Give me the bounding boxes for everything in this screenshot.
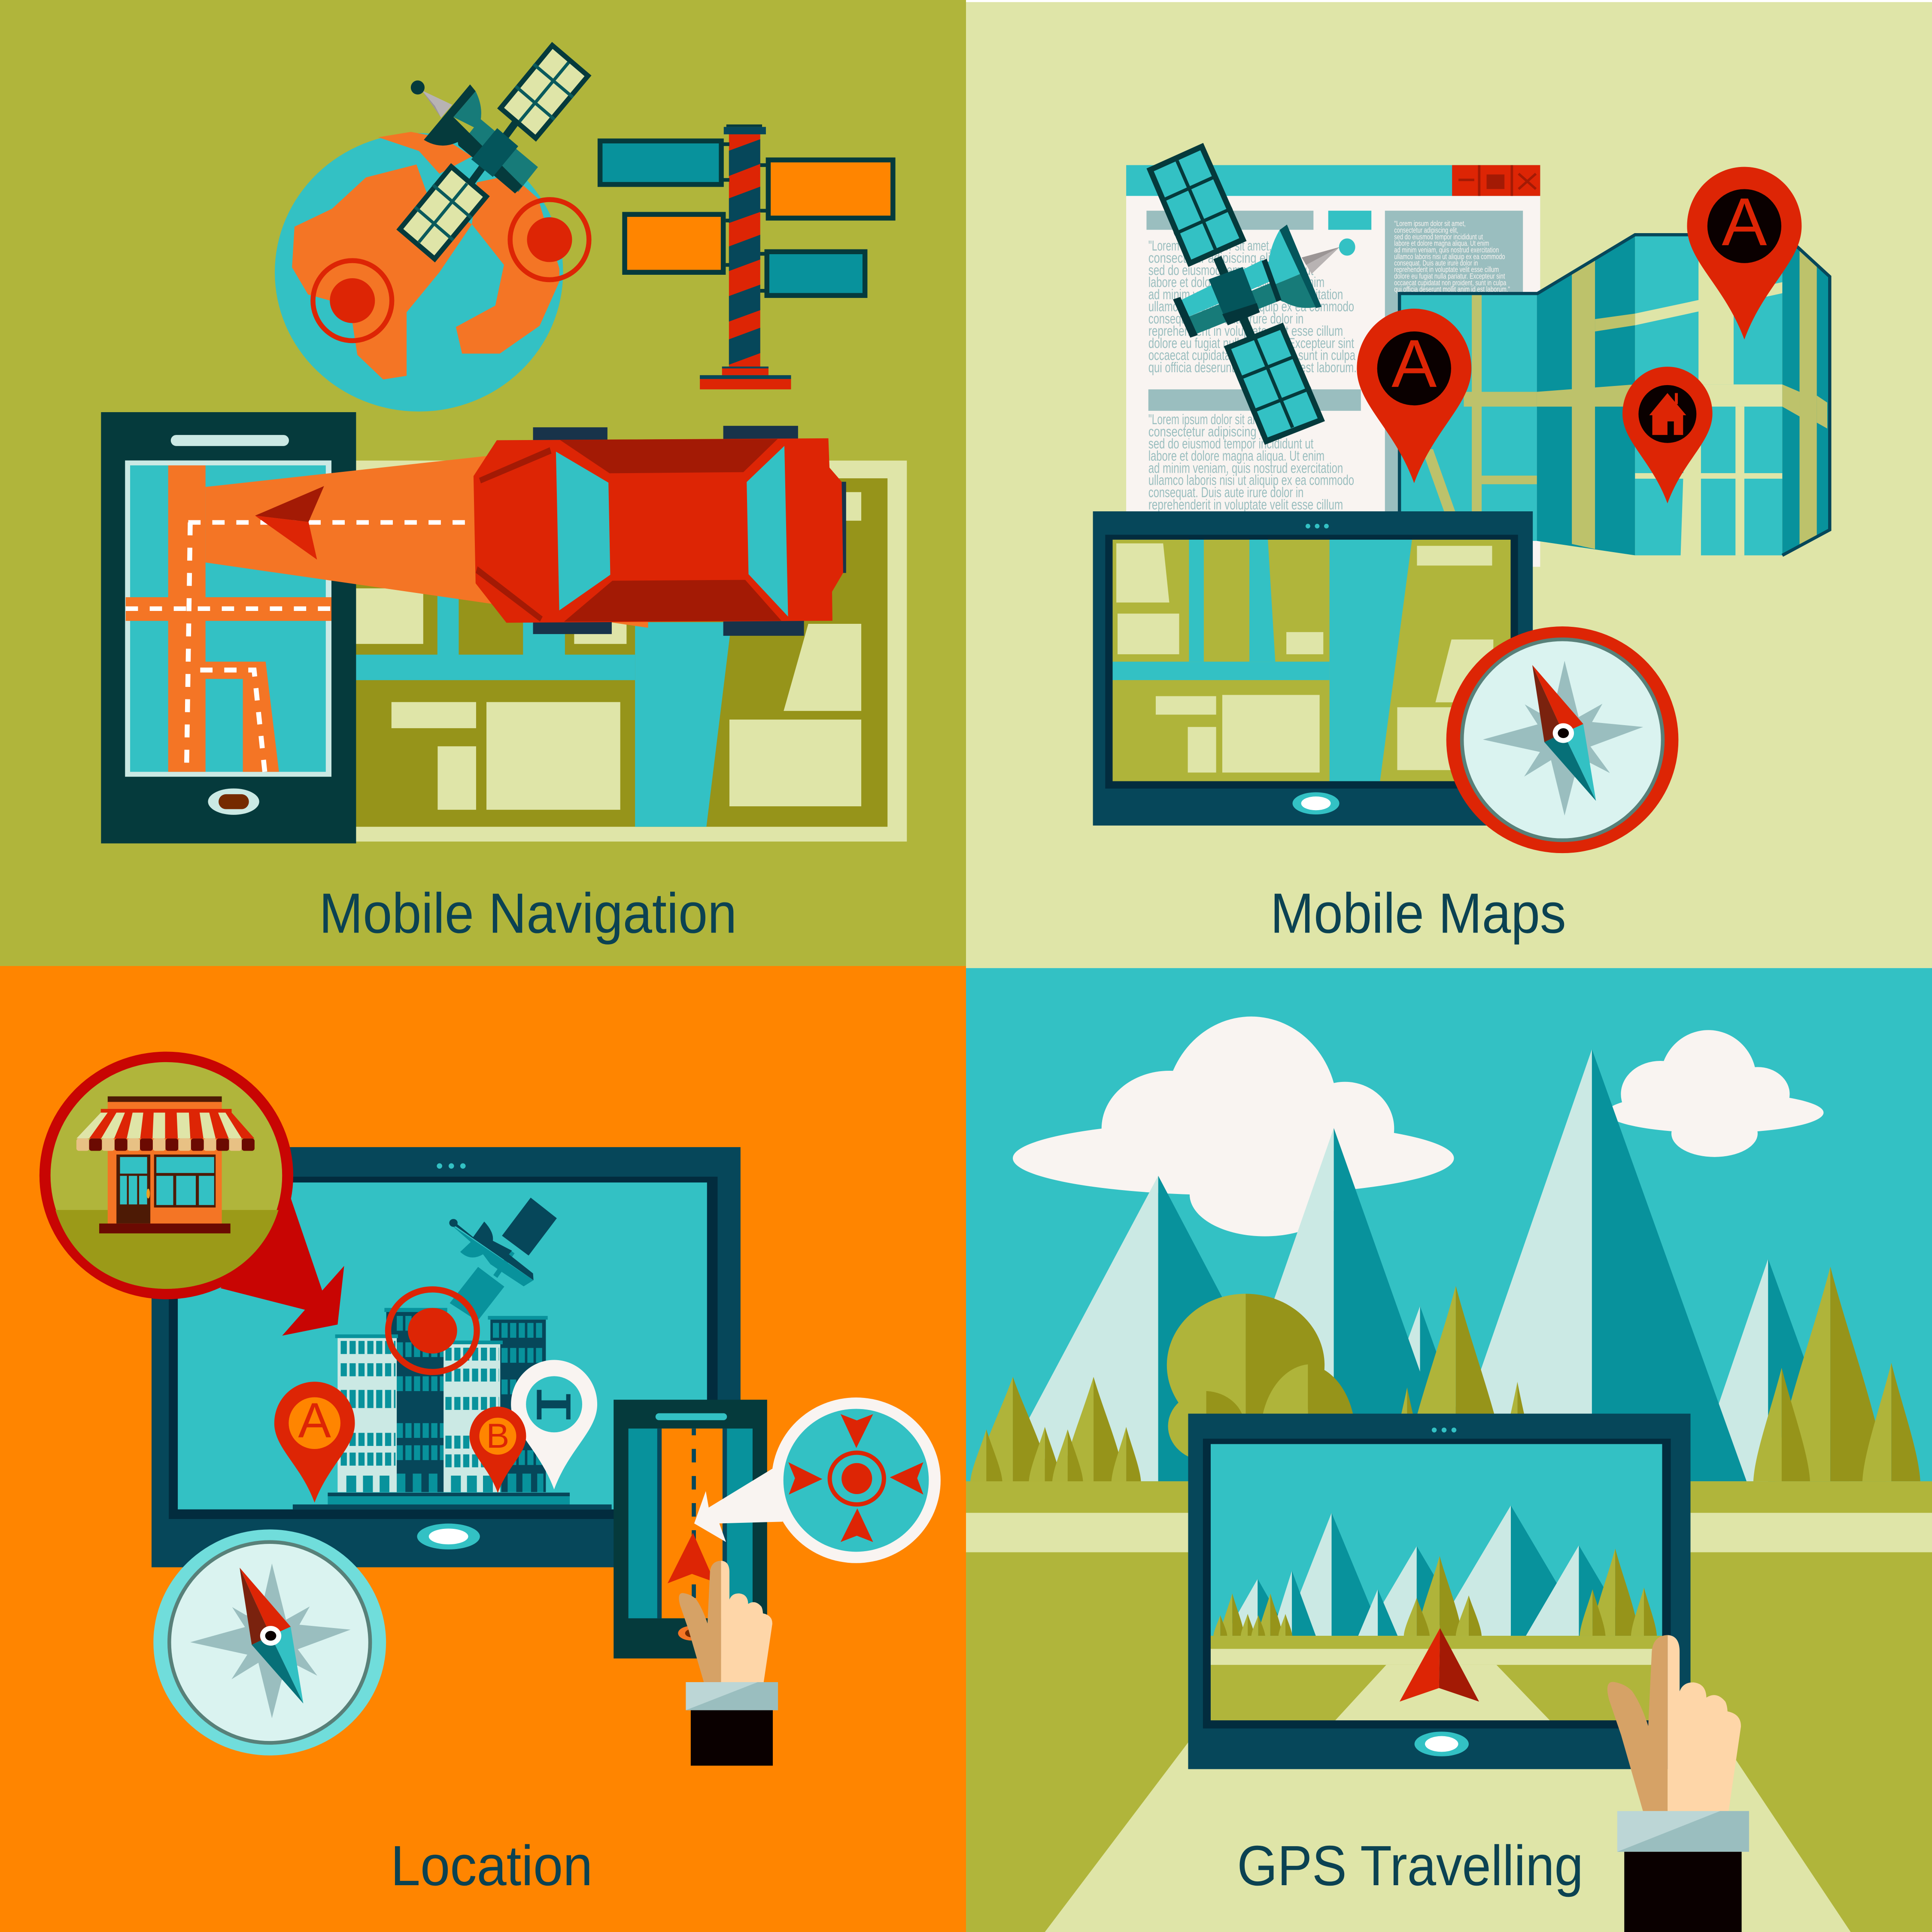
panel: mobile maps [966, 2, 1932, 968]
text block: article lorem 2: sed do eiusmod tempor incididunt ut [1148, 436, 1313, 452]
sign: lower left [625, 214, 723, 272]
icon: shop [76, 1097, 255, 1233]
text block: sidebar lorem: "Lorem ipsum dolor sit amet, [1394, 219, 1466, 228]
panel: mobile navigation [0, 0, 966, 966]
icon: pin A left: A [1391, 326, 1437, 401]
title: location: Location [391, 1834, 592, 1897]
text block: sidebar lorem: dolore eu fugiat nulla pariatur. Excepteur sint [1394, 272, 1505, 280]
mini trees [1213, 1549, 1657, 1636]
text block: article lorem 2 [1148, 411, 1354, 512]
text block: sidebar lorem: ullamco laboris nisi ut aliquip ex ea commodo [1394, 252, 1505, 261]
text block: article lorem 1: "Lorem ipsum dolor sit amet, [1148, 238, 1272, 254]
text block: sidebar lorem [1394, 219, 1510, 294]
text block: article lorem 1: ullamco laboris nisi ut aliquip ex ea commodo [1148, 298, 1354, 314]
icon: satellite [396, 42, 592, 262]
text block: sidebar lorem: ad minim veniam, quis nostrud exercitation [1394, 246, 1499, 254]
icon: pin A right [1687, 167, 1801, 340]
mountains [996, 1049, 1849, 1481]
text block: article lorem 1: ad minim veniam, quis nostrud exercitation [1148, 286, 1343, 302]
icon: pin hotel [511, 1360, 597, 1489]
icon: pin A: A [298, 1393, 331, 1448]
icon: pointing hand large [1607, 1635, 1749, 1932]
text block: article lorem 2: labore et dolore magna aliqua. Ut enim [1148, 448, 1324, 464]
text block: sidebar lorem: labore et dolore magna aliqua. Ut enim [1394, 239, 1489, 248]
text block: sidebar lorem: consequat. Duis aute irure dolor in [1394, 258, 1478, 267]
icon: satellite [1146, 143, 1355, 445]
text block: sidebar lorem: consectetur adipiscing elit, [1394, 226, 1458, 234]
icon: satellite silhouette [449, 1198, 557, 1321]
icon: pin B [469, 1406, 526, 1493]
text block: article lorem 2: ullamco laboris nisi ut aliquip ex ea commodo [1148, 472, 1354, 488]
icon: navigation arrow [1400, 1628, 1479, 1701]
icon: pin A right: A [1722, 184, 1767, 260]
map: paper street map [345, 461, 907, 841]
icon: signpost [600, 125, 893, 389]
route beam [188, 456, 648, 628]
text block: article lorem 1: qui officia deserunt mollit anim id est laborum." [1148, 359, 1360, 375]
tablet: landscape view [1188, 1414, 1691, 1769]
text block: sidebar lorem: reprehenderit in voluptate velit esse cillum [1394, 265, 1499, 274]
text block: article lorem 1: dolore eu fugiat nulla pariatur. Excepteur sint [1148, 335, 1354, 351]
icon: car from above [474, 426, 846, 636]
trees [970, 1267, 1920, 1482]
text block: article lorem 1: occaecat cupidatat non proident, sunt in culpa [1148, 347, 1355, 363]
panel: gps travelling [966, 968, 1932, 1932]
icon: compass red [1446, 626, 1678, 853]
text block: article lorem 1 [1148, 238, 1360, 375]
icon: pin A left [1357, 309, 1471, 483]
phone: navigation screen [101, 412, 356, 843]
title: mobile maps: Mobile Maps [1270, 881, 1566, 945]
text block: article lorem 1: sed do eiusmod tempor incididunt ut [1148, 262, 1313, 278]
mini mountains [1225, 1505, 1632, 1636]
icon: pin A [274, 1382, 355, 1503]
text block: article lorem 1: consequat. Duis aute irure dolor in [1148, 311, 1303, 327]
title: gps travelling: GPS Travelling [1237, 1834, 1583, 1897]
phone: road view [614, 1400, 767, 1659]
text block: article lorem 1: labore et dolore magna aliqua. Ut enim [1148, 274, 1324, 290]
text block: article lorem 2: ad minim veniam, quis nostrud exercitation [1148, 460, 1343, 476]
callout: direction pad [694, 1397, 941, 1563]
bushes [1167, 1294, 1355, 1507]
browser window [1126, 165, 1540, 567]
text block: article lorem 2: reprehenderit in voluptate velit esse cillum [1148, 496, 1343, 512]
icon: direction arrow [255, 486, 324, 560]
tablet: map view [1093, 511, 1533, 826]
icon: compass teal [153, 1529, 386, 1756]
sign: top right [768, 160, 893, 218]
text block: sidebar lorem: qui officia deserunt mollit anim id est laborum." [1394, 285, 1510, 294]
icon: pin home [1622, 367, 1713, 504]
callout: shop magnifier [39, 1051, 344, 1336]
text block: article lorem 1: reprehenderit in voluptate velit esse cillum [1148, 323, 1343, 339]
ground and road [966, 1481, 1932, 1932]
tablet: city view [152, 1147, 741, 1567]
panel: location [0, 966, 966, 1932]
icon: globe with location rings [275, 132, 589, 412]
clouds [1013, 1017, 1823, 1236]
text block: sidebar lorem: sed do eiusmod tempor incididunt ut [1394, 232, 1483, 241]
title: mobile navigation: Mobile Navigation [319, 881, 737, 945]
text block: article lorem 1: consectetur adipiscing elit, [1148, 250, 1276, 266]
icon: target ring [388, 1289, 477, 1372]
sign: top left [600, 141, 721, 185]
icon: pointing hand [679, 1561, 778, 1766]
icon: pin B: B [486, 1417, 509, 1455]
text block: article lorem 2: consectetur adipiscing elit, [1148, 424, 1276, 440]
folded paper map [1398, 234, 1830, 555]
sign: lower right [767, 252, 865, 295]
text block: article lorem 2: consequat. Duis aute irure dolor in [1148, 484, 1303, 500]
text block: sidebar lorem: occaecat cupidatat non proident, sunt in culpa [1394, 278, 1507, 287]
text block: article lorem 2: "Lorem ipsum dolor sit amet, [1148, 411, 1272, 427]
buildings: city block [293, 1308, 612, 1510]
